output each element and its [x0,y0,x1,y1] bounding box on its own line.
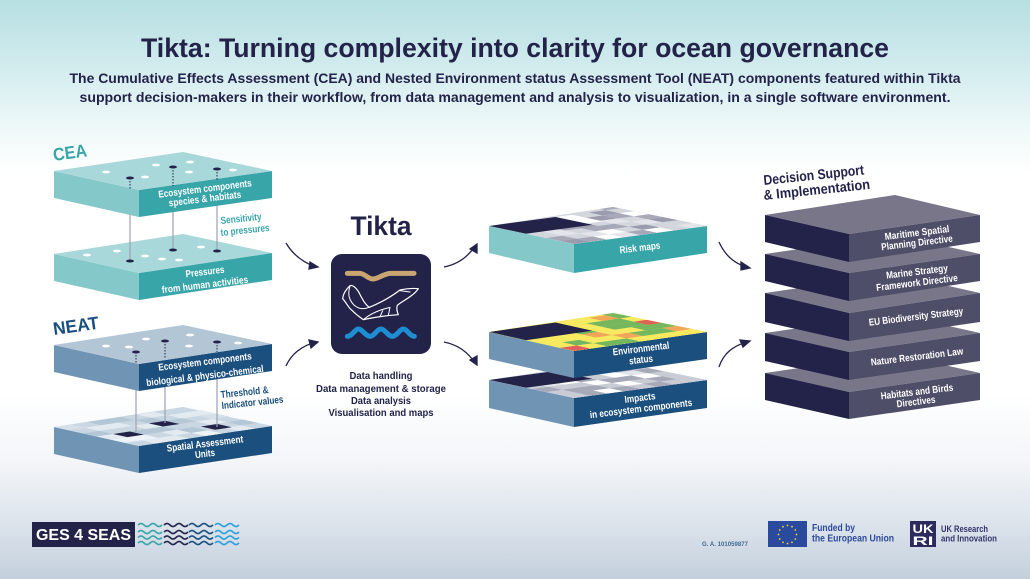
arrow: Tikta to environmental status [444,342,477,365]
layer: habitats and birds directives: Directives [896,395,936,410]
layer: pressures from human activities: from human activities [161,275,249,296]
layer: marine strategy framework directive [765,235,980,301]
layer: maritime spatial planning directive [765,195,980,262]
lower nodes: CEA [126,248,221,262]
layer: marine strategy framework directive: Marine Strategy [886,263,949,282]
heading: decision support and implementation: & Implementation [763,176,871,203]
layer: pressures from human activities: Pressures [185,265,225,280]
label: sensitivity to pressures [220,212,270,239]
layer: habitats and birds directives: Habitats and Birds [880,383,954,402]
text block: Tikta functions [316,370,446,419]
logo: UK Research and Innovation [910,521,997,548]
title: Tikta: Turning complexity into clarity for ocean governance [141,33,889,63]
heading: NEAT: NEAT [52,313,100,339]
text block: Tikta functions: Data analysis [351,395,411,407]
panel: impacts layer [489,368,707,427]
panel: NEAT layers [54,325,284,473]
panel: decision support stack [765,195,980,419]
text block: Tikta functions: Visualisation and maps [328,407,434,419]
layer: spatial assessment units: Units [194,448,216,461]
grant number: G. A. 101059877 [702,542,749,548]
arrow: Tikta to risk maps [444,244,477,267]
logo: GES4SEAS [32,522,239,547]
logo: funded by the European Union: Funded by [812,522,855,534]
layer: habitats and birds directives [765,354,980,419]
arrow: risk maps to decision support [719,242,750,270]
subtitle [70,70,961,105]
label: threshold and indicator values [220,385,284,412]
text block: Tikta functions: Data management & storage [316,383,446,395]
connector lines: CEA [130,205,217,261]
panel: impacts layer: in ecosystem components [589,398,693,421]
label: sensitivity to pressures: to pressures [220,223,270,239]
layer: ecosystem components biological and physico-chemical: Ecosystem components [158,351,253,374]
logo: UK Research and Innovation: and Innovation [941,534,997,544]
panel: CEA layers [54,152,272,300]
heading: CEA: CEA [52,140,88,165]
layer: ecosystem components species and habitats [54,152,272,217]
layer: maritime spatial planning directive: Planning Directive [881,234,954,253]
logo: UK Research and Innovation: UK [912,524,934,536]
layer: ecosystem components biological and physico-chemical: biological & physico-chemical [146,364,264,389]
panel: environmental status layer [489,313,707,378]
logo: GES4SEAS: GES 4 SEAS [36,527,131,544]
subtitle: The Cumulative Effects Assessment (CEA) and Nested Environment status Assessment Tool (NEAT) components featured within Tikta [70,70,961,86]
label: threshold and indicator values: Indicator values [221,395,284,412]
arrow: CEA to Tikta [286,243,318,269]
icon: Tikta logo [331,254,431,354]
logo: UK Research and Innovation: UK Research [941,524,988,535]
layer: maritime spatial planning directive: Maritime Spatial [884,224,950,243]
logo: UK Research and Innovation: RI [912,536,934,548]
layer: EU biodiversity strategy: EU Biodiversity Strategy [868,306,964,329]
layer: spatial assessment units: Spatial Assessment [166,434,244,455]
layer: pressures from human activities [54,234,272,300]
heading: decision support and implementation [763,161,871,203]
text block: Tikta functions: Data handling [350,370,412,382]
layer: ecosystem components biological and physico-chemical [54,325,272,391]
panel: risk maps layer [489,207,707,273]
layer: spatial assessment units [54,407,272,473]
arrow: status to decision support [719,340,750,367]
logo: funded by the European Union: the European Union [812,532,894,544]
arrow: NEAT to Tikta [286,340,318,366]
layer: nature restoration law: Nature Restoration Law [870,346,964,369]
label: threshold and indicator values: Threshold & [220,385,269,401]
layer: EU biodiversity strategy [765,274,980,341]
panel: environmental status layer: status [628,354,654,367]
heading: decision support and implementation: Decision Support [763,161,865,188]
layer: ecosystem components species and habitats: Ecosystem components [158,178,253,201]
panel: impacts layer: Impacts [624,391,656,406]
logo: funded by the European Union [768,521,894,547]
subtitle: support decision-makers in their workflow, from data management and analysis to visualization, in a single software environment. [80,89,950,105]
layer: marine strategy framework directive: Framework Directive [876,273,959,294]
panel: risk maps layer: Risk maps [619,240,661,256]
layer: nature restoration law [765,314,980,380]
label: sensitivity to pressures: Sensitivity [220,212,262,227]
layer: ecosystem components species and habitats: species & habitats [168,190,242,209]
connector lines: NEAT [136,378,217,432]
panel: environmental status layer: Environmental [612,341,670,358]
heading: Tikta: Tikta [350,211,412,241]
